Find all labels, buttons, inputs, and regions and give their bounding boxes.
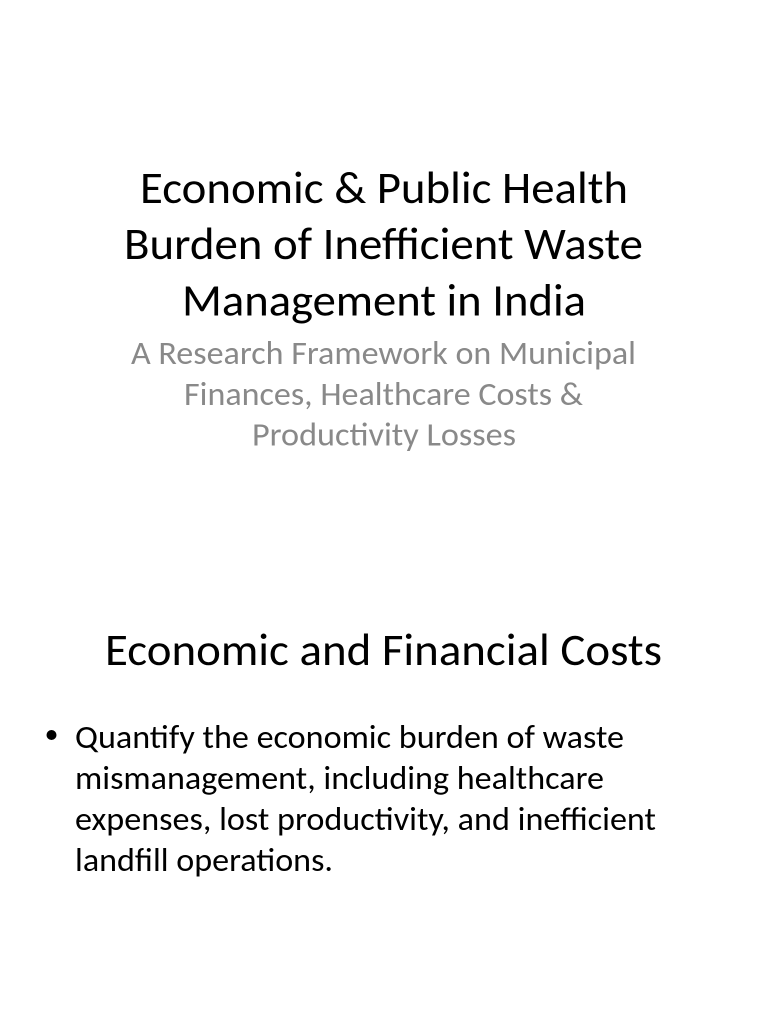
bullet text: landfill operations. xyxy=(75,840,333,880)
subtitle: Finances, Healthcare Costs & xyxy=(184,374,583,414)
bullet point xyxy=(46,717,656,880)
bullet text: Quantify the economic burden of waste xyxy=(75,717,624,757)
bullet marker xyxy=(46,730,56,740)
subtitle: A Research Framework on Municipal xyxy=(131,333,636,373)
section heading: Economic and Financial Costs xyxy=(105,623,662,678)
bullet text: expenses, lost productivity, and inefficient xyxy=(75,799,656,839)
bullet text: mismanagement, including healthcare xyxy=(75,758,604,798)
title: Economic & Public Health xyxy=(140,161,628,216)
subtitle: Productivity Losses xyxy=(252,414,516,454)
title: Management in India xyxy=(182,274,586,328)
subtitle xyxy=(131,333,636,454)
title: Burden of Inefficient Waste xyxy=(124,217,643,272)
title xyxy=(124,161,643,328)
bullet text xyxy=(75,717,656,880)
